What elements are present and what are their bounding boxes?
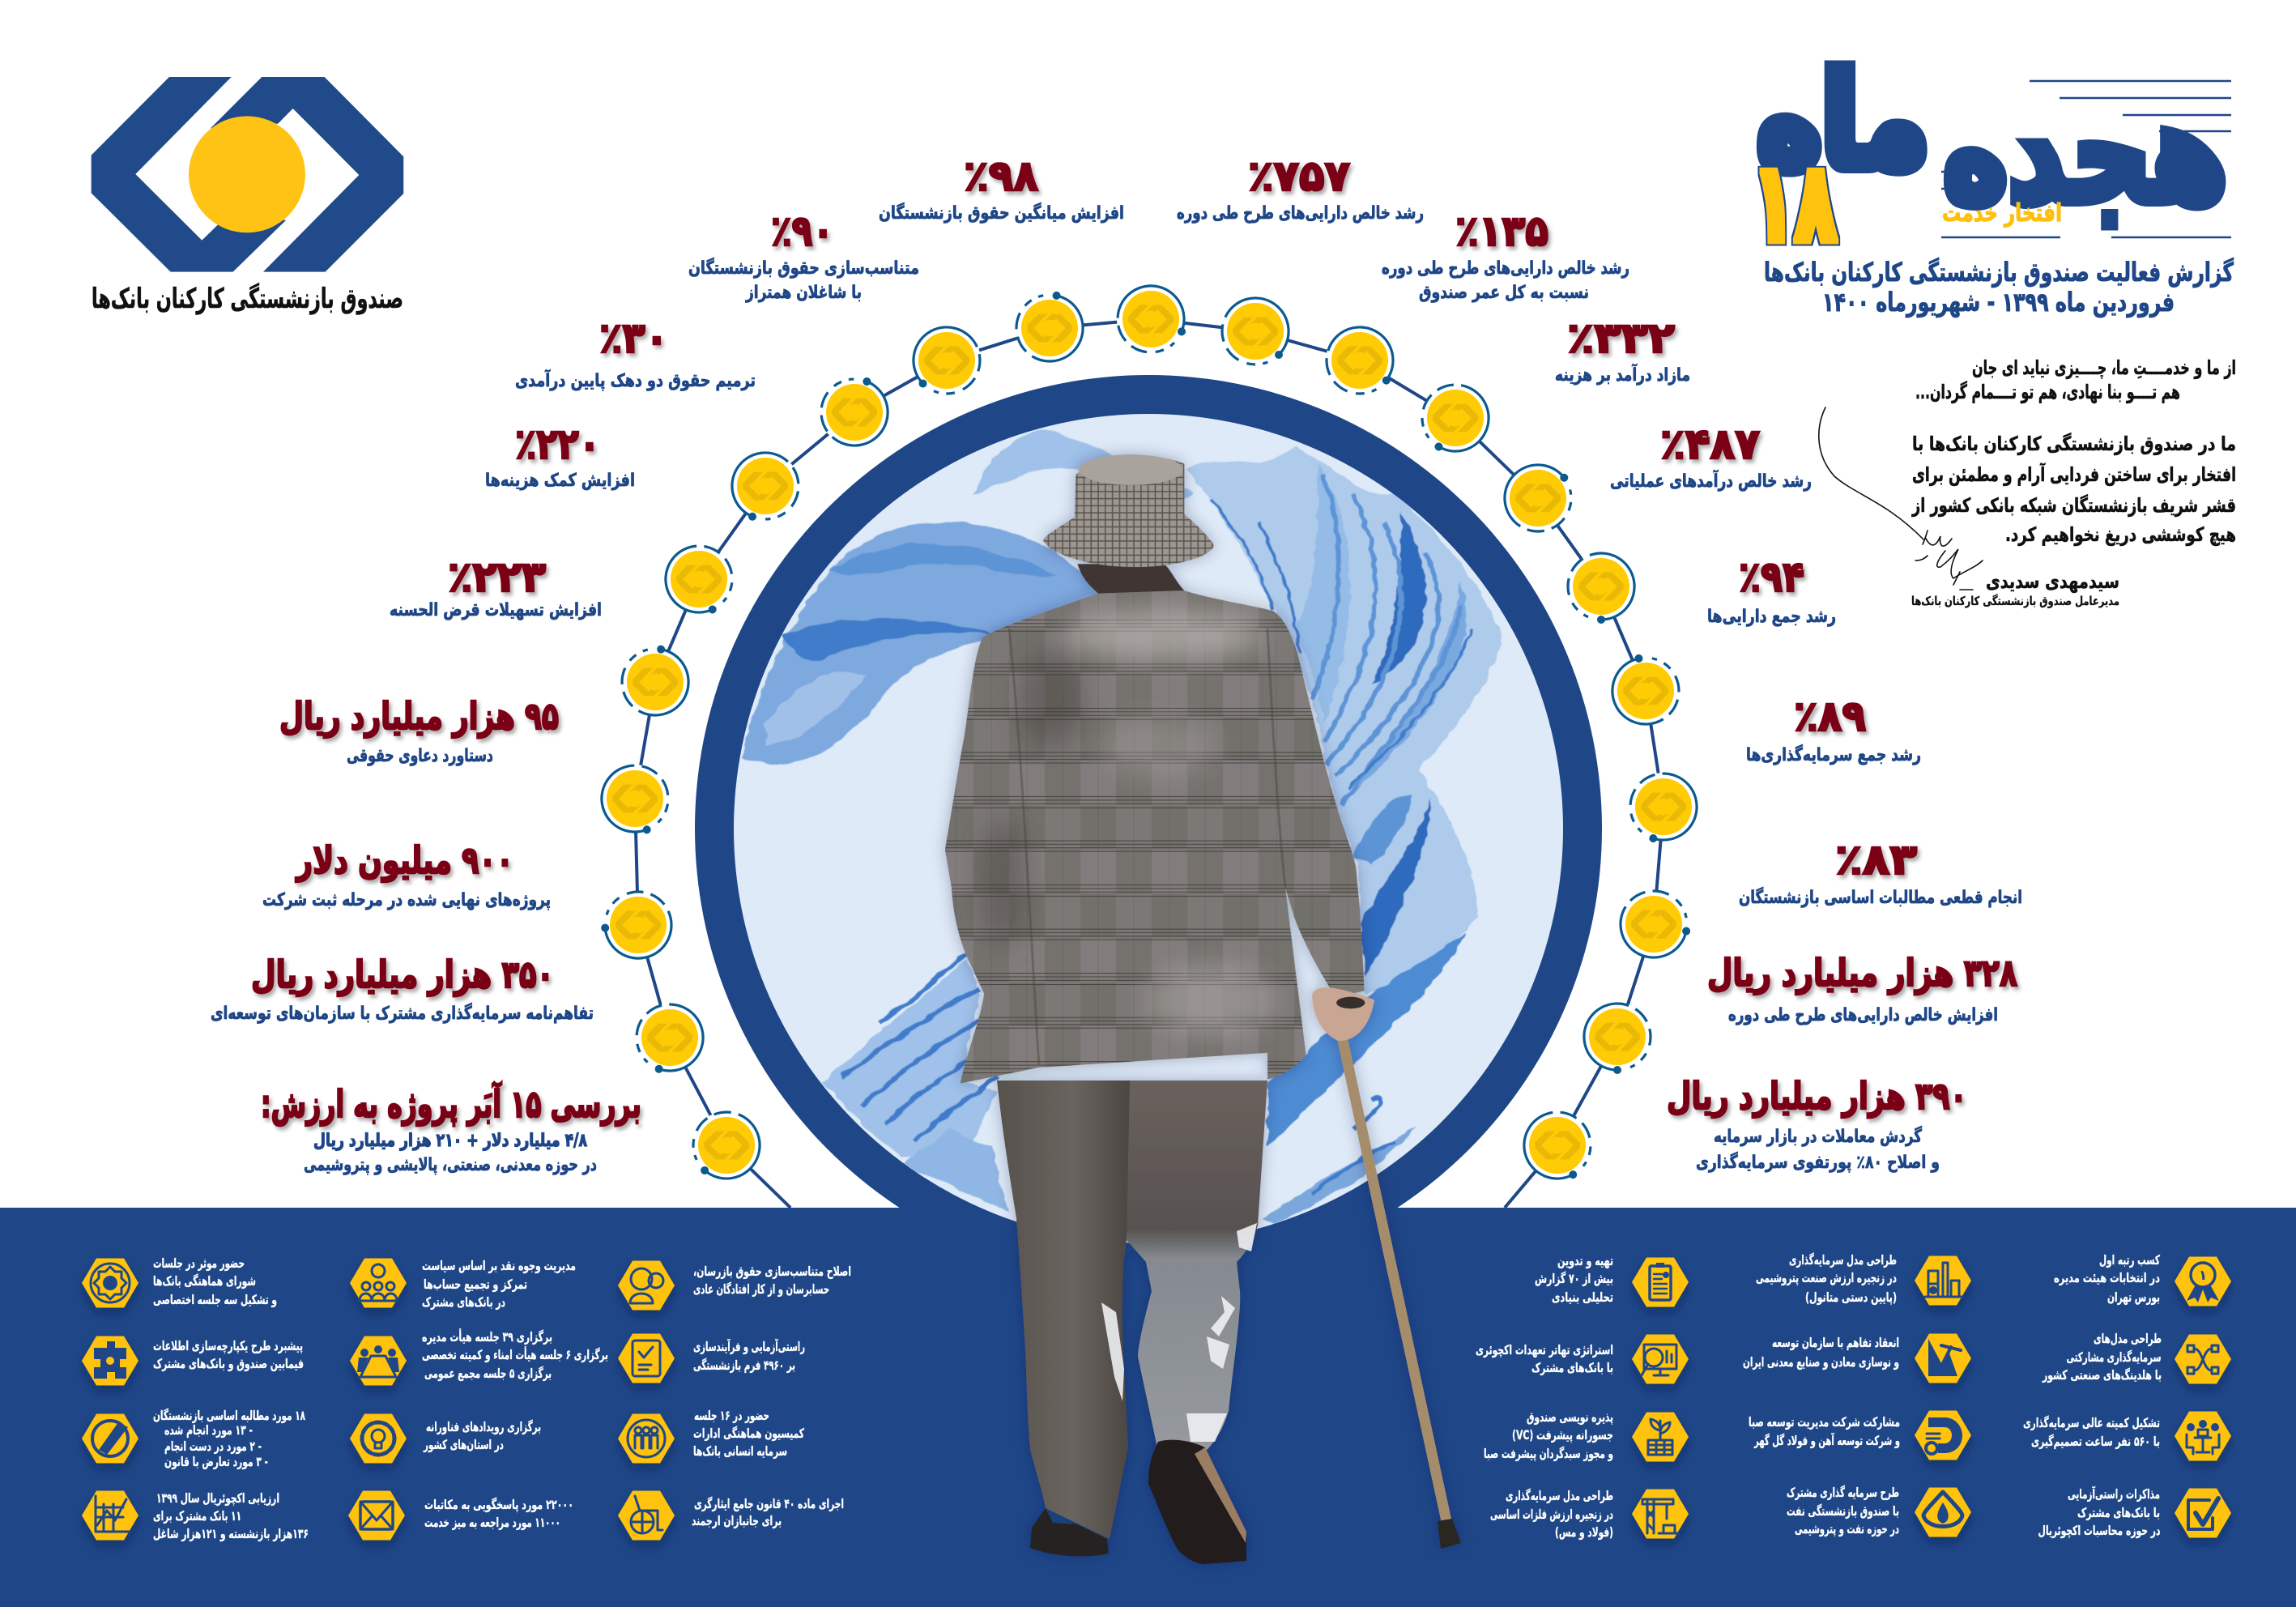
stat: 98 percent: افزایش میانگین حقوق بازنشستگان — [879, 202, 1124, 224]
item: auditors pay: حسابرسان و از کار افتادگان عادی — [693, 1281, 829, 1297]
item: metals model: (فولاد و مس) — [1555, 1524, 1613, 1540]
stat: 487 percent: ٪۴۸۷ — [1660, 420, 1760, 469]
stat: 89 percent: ٪۸۹ — [1794, 693, 1866, 741]
hand — [1312, 987, 1374, 1041]
stat: 220 percent: افزایش کمک هزینه‌ها — [485, 471, 635, 491]
item: oil fund plan: طرح سرمایه گذاری مشترک — [1787, 1485, 1899, 1500]
stat: 332 percent: مازاد درآمد بر هزینه — [1555, 363, 1690, 386]
stat: 94 percent — [1707, 553, 1836, 627]
message from CEO — [1911, 356, 2236, 608]
stat: 94 percent: رشد جمع دارایی‌ها — [1707, 607, 1836, 627]
stat: 95 thousand billion: ۹۵ هزار میلیارد ریال — [279, 694, 559, 738]
stat: 487 percent: رشد خالص درآمدهای عملیاتی — [1610, 469, 1812, 492]
item: VC fund: جسورانه پیشرفت (VC) — [1512, 1427, 1613, 1443]
item: tech events — [350, 1414, 541, 1463]
stat: 390 thousand billion: گردش معاملات در بازار سرمایه — [1714, 1125, 1922, 1147]
node 16 — [1567, 552, 1635, 624]
item: participatory models: طراحی مدل‌های — [2094, 1331, 2162, 1346]
stat: 15 mega projects: در حوزه معدنی، صنعتی، پالایشی و پتروشیمی — [304, 1155, 597, 1175]
item: mining MoU: و نوسازی معادن و صنایع معدنی ایران — [1743, 1354, 1899, 1370]
item: first rank: در انتخابات هیئت مدیره — [2054, 1270, 2160, 1285]
timeline connector — [635, 319, 1663, 1208]
item: council meetings: و تشکیل سه جلسه اختصاصی — [153, 1292, 277, 1307]
stat: 89 percent: رشد جمع سرمایه‌گذاری‌ها — [1746, 744, 1921, 765]
stat: 390 thousand billion — [1667, 1074, 1967, 1173]
icon: oil flame — [1915, 1487, 1971, 1537]
word: hejdah: هجده — [1943, 74, 2228, 234]
item: auditors pay — [618, 1260, 851, 1311]
stat: 220 percent — [485, 420, 635, 491]
item: forms verification: راستی‌آزمایی و فرآیندسازی — [693, 1338, 805, 1354]
stat: 30 percent: ٪۳۰ — [599, 314, 668, 363]
stat: 95 thousand billion — [279, 694, 559, 766]
stat: 83 percent — [1739, 836, 2022, 908]
stat: 328 thousand billion: افزایش خالص دارایی‌های طرح طی دوره — [1728, 1005, 1998, 1025]
item: data integration — [82, 1336, 304, 1385]
item: auditors pay: اصلاح متناسب‌سازی حقوق بازرسان، — [693, 1264, 851, 1279]
word: mah: ماه — [1757, 45, 1929, 197]
node 10 — [1010, 284, 1090, 368]
stat: 223 percent: ٪۲۲۳ — [448, 553, 546, 602]
item: verification talks — [2038, 1486, 2231, 1539]
item: first rank: بورس تهران — [2107, 1289, 2160, 1305]
item: actuarial offset — [1476, 1335, 1689, 1383]
item: participatory models — [2042, 1331, 2231, 1383]
item: VC fund: و مجوز سبدگردان پیشرفت صبا — [1484, 1446, 1613, 1462]
item: board meetings: برگزاری ۳۹ جلسه هیأت مدیره — [422, 1328, 552, 1345]
icon: rosette — [2175, 1257, 2231, 1306]
item: investment committee — [2023, 1411, 2231, 1461]
item: verification talks: مذاکرات راستی‌آزمایی — [2068, 1486, 2160, 1502]
stat: 15 mega projects: ۴/۸ میلیارد دلار + ۲۱۰ هزار میلیارد ریال — [313, 1131, 587, 1151]
item: pensioner demands: - ۱۳ مورد انجام شده — [164, 1422, 253, 1438]
stat: 90 percent — [688, 207, 919, 303]
icon: check box — [2175, 1489, 2231, 1537]
icon: clipboard — [1632, 1257, 1689, 1307]
item: data integration: پیشبرد طرح یکپارچه‌سازی اطلاعات — [153, 1338, 303, 1354]
item: actuarial review: ارزیابی اکچوئریال سال ۱۳۹۹ — [156, 1490, 279, 1507]
stat: 390 thousand billion: ۳۹۰ هزار میلیارد ریال — [1667, 1074, 1967, 1118]
stat: 223 percent: افزایش تسهیلات قرض الحسنه — [390, 600, 602, 620]
item: correspondence — [348, 1490, 573, 1541]
icon: meeting table — [350, 1336, 407, 1385]
node 13 — [1314, 314, 1409, 409]
item: mining MoU — [1743, 1333, 1971, 1383]
stat: 220 percent: ٪۲۲۰ — [515, 420, 600, 469]
stat: 15 mega projects — [261, 1081, 641, 1175]
item: VC fund: پذیره نویسی صندوق — [1527, 1409, 1613, 1426]
item: pensioner demands: - ۳ مورد تعارض با قانون — [164, 1454, 268, 1469]
icon: puzzle — [82, 1336, 138, 1385]
node 11 — [1108, 276, 1198, 364]
stat: 900 million dollars: ۹۰۰ میلیون دلار — [295, 838, 513, 882]
node 19 — [1614, 884, 1698, 965]
highlights — [1101, 1223, 1257, 1442]
item: investment committee: با ۵۶۰ نفر ساعت تصمیم‌گیری — [2031, 1434, 2160, 1449]
item: cash management: مدیریت وجوه نقد بر اساس سیاست — [422, 1258, 576, 1273]
logotype lines — [1941, 81, 2231, 237]
item: council meetings: شورای هماهنگی بانک‌ها — [153, 1273, 256, 1289]
stat: 135 percent — [1382, 207, 1629, 303]
stat: 757 percent: ٪۷۵۷ — [1248, 152, 1350, 201]
icon: rosette: ۱ — [2199, 1268, 2207, 1284]
stat: 332 percent — [1555, 314, 1690, 386]
stat: 94 percent: ٪۹۴ — [1739, 553, 1804, 602]
item: correspondence: ۲۲۰۰۰ مورد پاسخگویی به مکاتبات — [424, 1497, 573, 1513]
item: petrochemical model — [1756, 1252, 1971, 1306]
item: reports — [1535, 1253, 1689, 1307]
stat: 135 percent: رشد خالص دارایی‌های طرح طی دوره — [1382, 258, 1629, 279]
stat: 757 percent — [1177, 152, 1424, 224]
stat: 757 percent: رشد خالص دارایی‌های طرح طی دوره — [1177, 203, 1424, 224]
stat: 135 percent: نسبت به کل عمر صندوق — [1419, 283, 1589, 303]
icon: person gauge — [618, 1260, 675, 1311]
node 9 — [897, 313, 994, 410]
stat: 350 thousand billion: ۳۵۰ هزار میلیارد ریال — [251, 953, 554, 996]
item: reports: تهیه و تدوین — [1557, 1253, 1613, 1268]
item: oil fund plan: با صندوق بازنشستگی نفت — [1787, 1503, 1899, 1519]
item: petrochemical model: (پایین دستی متانول) — [1805, 1289, 1897, 1306]
item: tech events: در استان‌های کشور — [423, 1437, 504, 1452]
item: Saba Golgohar: مشارکت شرکت مدیریت توسعه صبا — [1749, 1414, 1900, 1430]
item: mining MoU: انعقاد تفاهم با سازمان توسعه — [1772, 1335, 1899, 1350]
icon: crane — [1632, 1489, 1689, 1539]
item: correspondence: ۱۱۰۰۰ مورد مراجعه به میز خدمت — [424, 1515, 560, 1530]
node 15 — [1491, 449, 1587, 545]
item: HR commission — [618, 1408, 804, 1463]
item: tech events: برگزاری رویدادهای فناورانه — [426, 1419, 541, 1434]
stat: 83 percent: انجام قطعی مطالبات اساسی بازنشستگان — [1739, 886, 2022, 908]
trousers left leg — [997, 1081, 1134, 1539]
stat: 487 percent — [1610, 420, 1812, 492]
item: petrochemical model: در زنجیره ارزش صنعت پتروشیمی — [1756, 1270, 1897, 1286]
icon: chart — [82, 1490, 138, 1541]
icon: checklist — [618, 1333, 675, 1383]
item: veterans: اجرای ماده ۴۰ قانون جامع ایثارگری — [694, 1496, 844, 1511]
item: board meetings — [350, 1328, 608, 1385]
stat: 98 percent — [879, 152, 1124, 224]
item: pensioner demands: ۱۸ مورد مطالبه اساسی بازنشستگان — [153, 1408, 305, 1423]
item: actuarial offset: با بانک‌های مشترک — [1531, 1360, 1613, 1375]
node 18 — [1621, 765, 1706, 852]
panel: bottom achievements background — [0, 1208, 2296, 1607]
item: actuarial offset: استراتژی تهاتر تعهدات اکچوئری — [1476, 1342, 1613, 1358]
stat: 328 thousand billion: ۳۲۸ هزار میلیارد ریال — [1707, 951, 2017, 995]
item: actuarial review: ۱۱ بانک مشترک برای — [153, 1508, 241, 1524]
stat: 900 million dollars — [262, 838, 551, 910]
hat — [1043, 454, 1214, 567]
cane — [1342, 1037, 1461, 1549]
trousers right leg — [1127, 1081, 1267, 1451]
report title — [1764, 257, 2234, 318]
stat: 328 thousand billion — [1707, 951, 2017, 1025]
icon: monitor magnifier — [1632, 1335, 1689, 1383]
node 2 — [626, 995, 712, 1084]
stat: 90 percent: متناسب‌سازی حقوق بازنشستگان — [688, 257, 919, 279]
item: veterans: برای جانبازان ارجمند — [692, 1513, 782, 1528]
right shoe — [1148, 1440, 1246, 1564]
icon: committee — [2175, 1411, 2231, 1461]
item: HR commission: حضور در ۱۶ جلسه — [694, 1408, 769, 1423]
item: actuarial review — [82, 1490, 309, 1541]
item: participatory models: سرمایه‌گذاری مشارکتی — [2067, 1349, 2161, 1365]
icon: gear bulb — [350, 1414, 407, 1463]
item: board meetings: برگزاری ۶ جلسه هیأت امناء و کمیته تخصصی — [422, 1346, 608, 1362]
stat: 83 percent: ٪۸۳ — [1835, 836, 1917, 884]
stat: 98 percent: ٪۹۸ — [964, 152, 1038, 201]
item: Saba Golgohar: و شرکت توسعه آهن و فولاد گل گهر — [1753, 1432, 1900, 1448]
item: board meetings: برگزاری ۵ جلسه مجمع عمومی — [424, 1366, 552, 1381]
item: pensioner demands — [82, 1408, 305, 1469]
item: forms verification: بر ۴۹۶۰ فرم بازنشستگی — [693, 1358, 795, 1373]
icon: pickaxe — [1915, 1333, 1971, 1383]
stat: 30 percent: ترمیم حقوق دو دهک پایین درآمدی — [515, 369, 756, 391]
node 4 — [592, 756, 679, 846]
logo text: صندوق بازنشستگی کارکنان بانک‌ها — [92, 283, 403, 315]
item: HR commission: کمیسیون هماهنگی ادارات — [693, 1426, 804, 1441]
item: council meetings: حضور موثر در جلسات — [153, 1255, 245, 1271]
item: verification talks: با بانک‌های مشترک — [2077, 1505, 2160, 1520]
item: pensioner demands: - ۲ مورد در دست انجام — [164, 1439, 262, 1454]
item: HR commission: سرمایه انسانی بانک‌ها — [693, 1443, 787, 1459]
man with cane — [945, 454, 1461, 1564]
item: cash management — [350, 1258, 576, 1310]
item: VC fund — [1484, 1409, 1689, 1462]
item: metals model: در زنجیره ارزش فلزات اساسی — [1490, 1507, 1613, 1522]
item: reports: بیش از ۷۰ گزارش — [1535, 1271, 1613, 1286]
icon: envelope — [348, 1490, 405, 1541]
stat: 135 percent: ٪۱۳۵ — [1455, 207, 1548, 256]
stat: 332 percent: ٪۳۳۲ — [1567, 314, 1675, 363]
stat: 350 thousand billion: تفاهم‌نامه سرمایه‌گذاری مشترک با سازمان‌های توسعه‌ای — [211, 1002, 594, 1024]
item: metals model: طراحی مدل سرمایه‌گذاری — [1506, 1488, 1613, 1503]
neck — [1077, 564, 1184, 594]
item: cash management: در بانک‌های مشترک — [422, 1294, 505, 1310]
item: oil fund plan — [1787, 1485, 1971, 1537]
icon: wheelchair — [618, 1490, 675, 1541]
icon: emblem — [82, 1259, 138, 1307]
timeline nodes — [592, 276, 1706, 1196]
node 14 — [1408, 373, 1501, 467]
message from CEO: سیدمهدی سدیدی — [1986, 570, 2119, 593]
message from CEO: مدیرعامل صندوق بازنشستگی کارکنان بانک‌ها — [1911, 594, 2119, 608]
node 7 — [720, 442, 809, 533]
stat: 90 percent: با شاغلان همتراز — [745, 283, 862, 303]
item: data integration: فیمابین صندوق و بانک‌های مشترک — [153, 1356, 304, 1371]
stat: 90 percent: ٪۹۰ — [771, 207, 833, 256]
node 3 — [598, 889, 674, 961]
icon: handshake — [82, 1414, 138, 1463]
item: forms verification — [618, 1333, 805, 1383]
stat: 223 percent — [390, 553, 602, 620]
stat: 95 thousand billion: دستاورد دعاوی حقوقی — [347, 746, 493, 766]
icon: network — [2175, 1335, 2231, 1383]
number 18: ۱۸ — [1753, 138, 1837, 268]
node 5 — [616, 640, 694, 721]
node 8 — [811, 365, 899, 455]
stat: 390 thousand billion: و اصلاح ۸۰٪ پورتفوی سرمایه‌گذاری — [1696, 1151, 1940, 1173]
node 20 — [1583, 1003, 1651, 1074]
item: cash management: تمرکز و تجمیع حساب‌ها — [424, 1277, 527, 1292]
signature — [1819, 407, 1983, 590]
item: actuarial review: ۱۳۶هزار بازنشسته و ۱۲۱هزار شاغل — [153, 1526, 309, 1541]
item: Saba Golgohar — [1749, 1411, 1971, 1460]
central circle with paint strokes — [695, 375, 1602, 1282]
item: investment committee: تشکیل کمیته عالی سرمایه‌گذاری — [2023, 1415, 2160, 1430]
item: first rank — [2054, 1252, 2231, 1306]
item: first rank: کسب رتبه اول — [2099, 1252, 2160, 1268]
icon: plant — [1915, 1255, 1971, 1306]
report title: فروردین ماه ۱۳۹۹ - شهریورماه ۱۴۰۰ — [1822, 287, 2175, 318]
node 6 — [655, 535, 744, 627]
item: oil fund plan: در حوزه نفت و پتروشیمی — [1795, 1521, 1899, 1537]
stat: 900 million dollars: پروژه‌های نهایی شده در مرحله ثبت شرکت — [262, 890, 551, 910]
stat: 350 thousand billion — [211, 953, 594, 1024]
node 1 — [677, 1098, 773, 1196]
tagline: افتخار خدمت — [1942, 199, 2062, 228]
node 12 — [1208, 284, 1306, 382]
icon: sprout — [1632, 1413, 1689, 1461]
stat: 30 percent — [515, 314, 756, 391]
item: participatory models: با هلدینگ‌های صنعتی کشور — [2042, 1367, 2162, 1383]
icon: people gear — [350, 1259, 407, 1307]
item: reports: تحلیلی بنیادی — [1552, 1289, 1613, 1305]
icon: people cycle — [618, 1414, 675, 1463]
node 17 — [1605, 647, 1685, 731]
node 21 — [1512, 1101, 1604, 1194]
item: verification talks: در حوزه محاسبات اکچوئریال — [2038, 1523, 2161, 1539]
jacket — [945, 590, 1365, 1084]
item: metals model — [1490, 1488, 1689, 1540]
left shoe — [1030, 1508, 1109, 1556]
stat: 89 percent — [1746, 693, 1921, 765]
item: council meetings — [82, 1255, 277, 1307]
icon: steel roll — [1915, 1411, 1971, 1460]
logo: fund mark — [92, 77, 403, 315]
campaign logotype — [1753, 45, 2231, 268]
item: veterans — [618, 1490, 844, 1541]
item: petrochemical model: طراحی مدل سرمایه‌گذاری — [1789, 1252, 1897, 1268]
stat: 15 mega projects: بررسی ۱۵ آبَر پروژه به ارزش: — [261, 1081, 641, 1127]
